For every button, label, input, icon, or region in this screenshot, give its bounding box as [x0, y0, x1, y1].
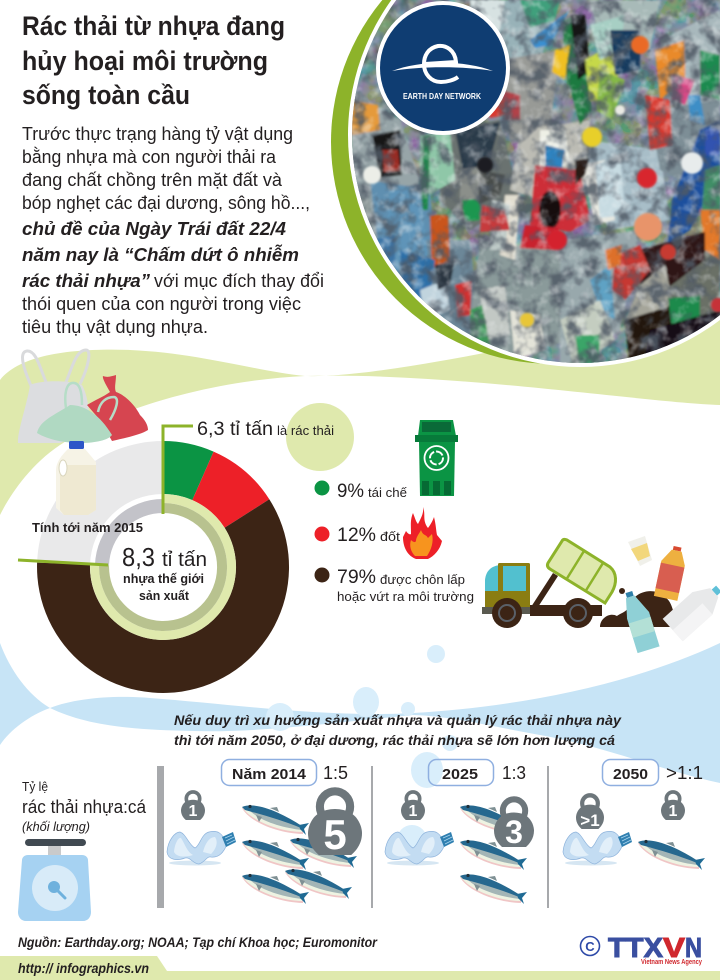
panel: photo of plastic waste — [331, 0, 720, 380]
callout: 6,3 tỉ tấn: là rác thải — [277, 423, 334, 438]
centre label: nhựa thế giới — [123, 571, 204, 586]
intro text block: chủ đề của Ngày Trái đất 22/4 — [22, 218, 286, 239]
red bag — [87, 375, 148, 441]
logo: Earth Day Network: EARTH DAY NETWORK — [403, 92, 481, 101]
weight 1 — [401, 792, 425, 820]
intro text block: rác thải nhựa” — [22, 270, 151, 291]
logo: TTXVN: V — [663, 932, 685, 963]
label: ratio: Tỷ lệ — [22, 779, 48, 794]
legend: 12% burned: 12% — [337, 525, 376, 546]
intro text block: với mục đích thay đổi — [154, 270, 324, 291]
title: hủy hoại môi trường — [22, 46, 268, 76]
centre label: tỉ tấn — [162, 549, 207, 571]
weight 5 — [308, 791, 362, 858]
ratio: >1:1 — [666, 763, 703, 783]
legend: 79% landfill: 79% — [337, 567, 376, 588]
heading: 2050 projection: thì tới năm 2050, ở đại dương, rác thải nhựa sẽ lớn hơn lượng cá — [174, 732, 615, 748]
year badge — [222, 760, 316, 786]
source: Nguồn: Earthday.org; NOAA; Tạp chí Khoa học; Euromonitor — [18, 935, 378, 950]
background: blue wave — [0, 643, 720, 855]
logo: TTXVN: Vietnam News Agency — [641, 959, 702, 966]
legend: 79% landfill: được chôn lấp — [380, 572, 465, 587]
weight >1: >1 — [580, 811, 600, 830]
fish group — [242, 805, 357, 904]
logo: TTXVN: C — [585, 939, 595, 954]
weight 1: 1 — [669, 803, 678, 820]
icon: plastic bags — [18, 350, 148, 443]
centre label: 8,3 — [122, 542, 155, 572]
column: 2025 — [385, 760, 534, 904]
centre label — [122, 542, 207, 603]
icon: green recycling bin — [415, 420, 458, 496]
segment: 9% recycled — [163, 441, 214, 500]
logo: Earth Day Network — [376, 1, 510, 135]
segment: other plastic (grey) — [37, 441, 163, 564]
weight 3 — [494, 799, 534, 850]
icon: waste pile and bottles — [600, 536, 720, 653]
weight 3: 3 — [505, 814, 523, 850]
intro text block: đang chất chồng trên mặt đất và — [22, 169, 283, 190]
label: tính tới năm 2015: Tính tới năm 2015 — [32, 520, 143, 535]
heading: 2050 projection — [174, 712, 622, 748]
segment: 79% landfill — [37, 499, 289, 693]
callout: 6,3 tỉ tấn: 6,3 tỉ tấn — [197, 418, 273, 440]
segment: 12% burned — [192, 452, 269, 528]
legend: 12% burned: đốt — [380, 529, 400, 544]
weight >1 — [576, 795, 604, 830]
label: ratio: rác thải nhựa:cá — [22, 797, 147, 817]
teal bottle — [620, 588, 660, 653]
year badge — [602, 760, 658, 786]
intro text block: năm nay là “Chấm dứt ô nhiễm — [22, 244, 299, 265]
weight 1: 1 — [409, 803, 418, 820]
weight 1 — [181, 792, 205, 820]
label: ratio: (khối lượng) — [22, 819, 90, 834]
column: 2014 — [167, 760, 362, 904]
legend: 9% recycled — [314, 480, 408, 502]
logo: TTXVN: N — [685, 932, 702, 963]
intro text block: thói quen của con người trong việc — [22, 293, 301, 314]
weight 1 — [661, 792, 685, 820]
intro text block: tiêu thụ vật dụng nhựa. — [22, 316, 208, 337]
icon: dump truck — [482, 539, 616, 628]
orange bottle — [654, 544, 688, 601]
background: lime wave — [0, 300, 720, 515]
icon: scale — [18, 839, 91, 921]
column: 2050 — [563, 760, 705, 870]
label: ratio — [22, 779, 147, 834]
fish group — [460, 805, 527, 904]
green bag — [37, 383, 117, 443]
plastic bottle — [385, 831, 454, 866]
year badge: Năm 2014 — [232, 767, 306, 783]
footer bar — [0, 956, 720, 980]
weight 1: 1 — [189, 803, 198, 820]
callout lines — [18, 426, 193, 565]
intro text block — [22, 123, 324, 337]
intro text block: Trước thực trạng hàng tỷ vật dụng — [22, 123, 293, 144]
legend: 79% landfill: hoặc vứt ra môi trường — [337, 589, 474, 604]
plastic bottle — [563, 831, 632, 866]
year badge — [428, 760, 494, 786]
donut chart — [37, 441, 289, 693]
legend: 79% landfill — [314, 567, 474, 604]
legend: 12% burned — [314, 525, 400, 546]
year badge: 2025 — [442, 767, 478, 783]
footer bar: http:// infographics.vn — [18, 961, 149, 976]
intro text block: bằng nhựa mà con người thải ra — [22, 146, 277, 167]
title — [22, 11, 285, 110]
title: Rác thải từ nhựa đang — [22, 11, 285, 41]
logo: TTXVN — [580, 932, 702, 966]
legend: 9% recycled: tái chế — [368, 485, 408, 500]
ratio: 1:5 — [323, 763, 348, 783]
plastic bottle — [167, 831, 236, 866]
heading: 2050 projection: Nếu duy trì xu hướng sản xuất nhựa và quản lý rác thải nhựa này — [174, 712, 622, 728]
weight 5: 5 — [323, 811, 347, 858]
callout: 6,3 tỉ tấn — [197, 418, 334, 440]
logo: TTXVN: TTX — [608, 932, 663, 963]
ratio: 1:3 — [502, 763, 526, 783]
inner ring — [95, 498, 232, 636]
fish — [638, 840, 705, 870]
column dividers — [157, 766, 549, 908]
intro text block: bóp nghẹt các đại dương, sông hồ..., — [22, 192, 310, 213]
white bottle — [663, 577, 720, 641]
icon: milk jug — [56, 441, 96, 515]
year badge: 2050 — [613, 767, 648, 783]
legend: 9% recycled: 9% — [337, 481, 364, 502]
centre label: sản xuất — [139, 588, 190, 603]
cup — [628, 536, 652, 566]
white bag — [18, 350, 90, 443]
icon: flame — [403, 507, 442, 559]
title: sống toàn cầu — [22, 80, 190, 110]
